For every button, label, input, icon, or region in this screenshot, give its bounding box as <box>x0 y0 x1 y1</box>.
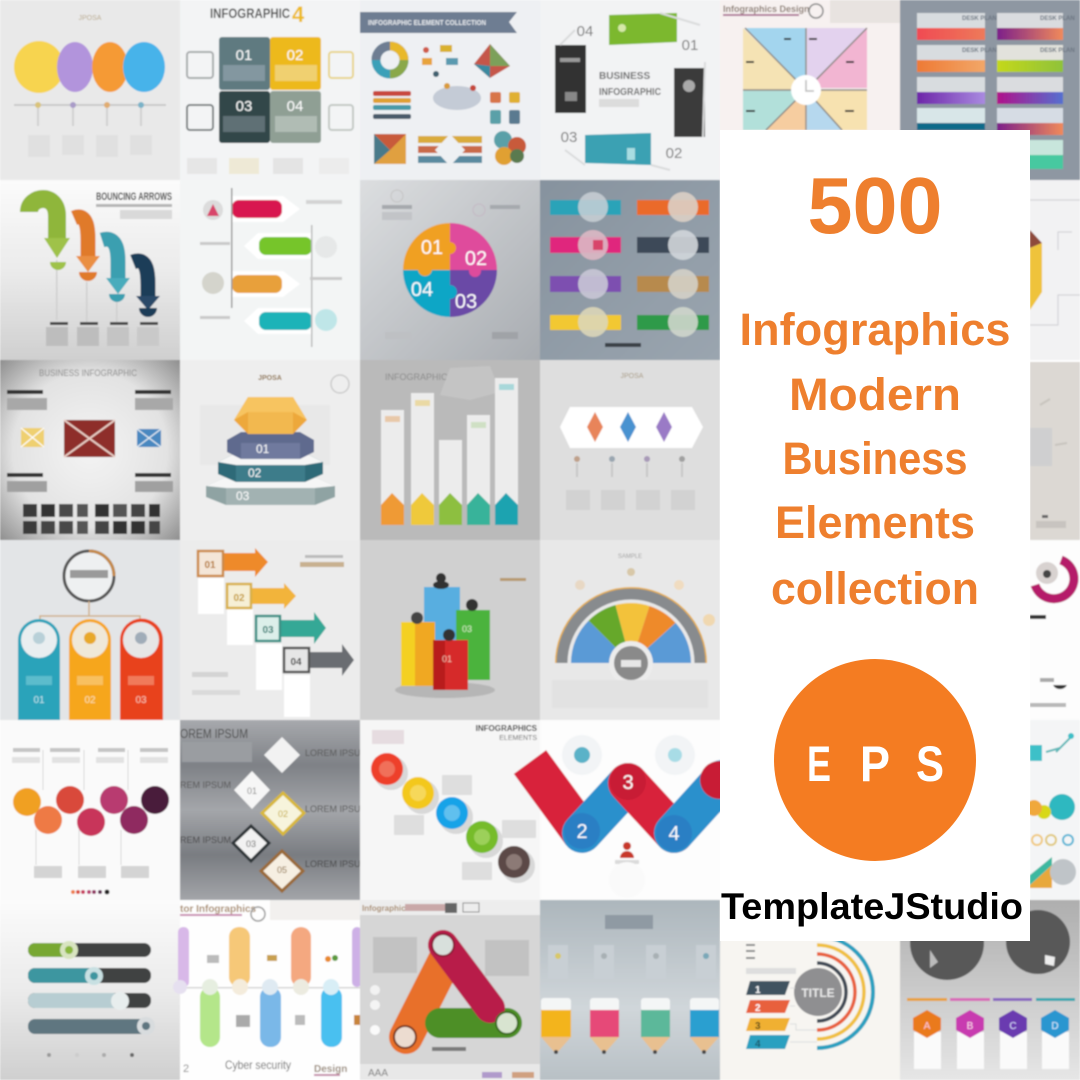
thumbnail: diamonds on grey stripes: LOREM IPSUM <box>305 748 368 758</box>
thumbnail: bouncing arrows <box>0 180 180 360</box>
thumbnail: bar chart with arrows: INFOGRAPHIC <box>385 372 448 382</box>
thumbnail: glass circle labels <box>540 180 720 360</box>
thumbnail: three pills with ring <box>0 540 180 722</box>
thumbnail: cyber security pills <box>173 900 362 1080</box>
thumbnail: ribbons with numbers: BUSINESS <box>599 71 650 82</box>
thumbnail: gradient label rows <box>900 0 1080 180</box>
thumbnail: diamonds on grey stripes: REM IPSUM <box>180 835 231 845</box>
thumbnail: four square infographic: 02 <box>287 47 303 64</box>
thumbnail: staircase arrows: 01 <box>204 560 216 571</box>
thumbnail: ribbons with numbers: INFOGRAPHIC <box>599 87 661 98</box>
thumbnail: diamonds on grey stripes: 03 <box>246 839 256 849</box>
thumbnail: stacked hexagon layers: 03 <box>236 489 250 503</box>
thumbnail: globes with labelled hexagons <box>900 900 1080 1080</box>
thumbnail: cyber security pills: Cyber security <box>225 1058 291 1072</box>
thumbnail: gradient label rows: DESK PLAN <box>1040 48 1075 54</box>
thumbnail: gradient label rows: DESK PLAN <box>962 16 997 22</box>
thumbnail: zigzag numbered ribbons: 4 <box>668 823 680 845</box>
thumbnail: puzzle circle: 01 <box>421 237 443 259</box>
thumbnail: diamonds on grey stripes: OREM IPSUM <box>180 726 248 741</box>
thumbnail: staircase arrows: 02 <box>233 593 245 604</box>
thumbnail: cyber security pills: 2 <box>183 1063 189 1075</box>
thumbnail: gradient label rows: DESK PLAN <box>962 48 997 54</box>
thumbnail: diamonds on grey stripes: 05 <box>277 865 287 875</box>
thumbnail fragment: beige map <box>1030 362 1080 540</box>
thumbnail: three pills with ring: 03 <box>135 695 147 706</box>
thumbnail: diamonds on grey stripes: 01 <box>247 786 257 796</box>
thumbnail: ribbons with numbers <box>540 0 720 180</box>
thumbnail: title with arcs: 3 <box>755 1021 761 1032</box>
thumbnail: pencils <box>540 900 720 1080</box>
thumbnail: title with arcs: TITLE <box>801 986 835 1000</box>
thumbnail: puzzle circle: 02 <box>465 248 487 270</box>
thumbnail: diamonds on grey stripes <box>180 720 368 900</box>
badge: EPS circle: E <box>807 736 831 792</box>
thumbnail: globes with labelled hexagons: A <box>924 1021 931 1032</box>
thumbnail: cyber security pills: tor Infographics <box>180 904 257 915</box>
thumbnail: puzzle circle: 04 <box>411 279 433 301</box>
white title panel <box>720 130 1030 941</box>
thumbnail: zigzag numbered ribbons: 2 <box>576 821 588 843</box>
thumbnail: hexagon frame pills <box>180 180 360 360</box>
thumbnail: diagonal circles: INFOGRAPHICS <box>476 724 538 733</box>
thumbnail: title with arcs: 1 <box>755 985 761 996</box>
thumbnail: zigzag numbered ribbons <box>530 720 738 900</box>
thumbnail: clock segments <box>720 0 900 180</box>
thumbnail: diamonds on grey stripes: 02 <box>278 809 288 819</box>
thumbnail: triangle of bands: AAA <box>368 1068 388 1079</box>
thumbnail: hexagons with diamonds <box>540 360 720 540</box>
thumbnail: title with arcs <box>720 900 900 1080</box>
thumbnail: 3D bars: 01 <box>442 654 452 664</box>
thumbnail: overlapping circles timeline: JPOSA <box>79 15 102 22</box>
thumbnail: ribbons with numbers: 04 <box>577 23 593 40</box>
heading: Infographics Modern Business Elements collection <box>740 304 1010 614</box>
badge: EPS circle: P <box>860 736 890 792</box>
thumbnail: 3D bars: 03 <box>462 624 472 634</box>
thumbnail: hexagons with diamonds: JPOSA <box>621 373 644 380</box>
thumbnail: semicircle gauge: SAMPLE <box>618 554 642 560</box>
thumbnail: puzzle circle: 03 <box>455 291 477 313</box>
thumbnail: staircase arrows: 03 <box>262 625 274 636</box>
thumbnail: ribbons with numbers: 03 <box>561 129 577 146</box>
thumbnail: diagonal circles <box>360 720 540 900</box>
thumbnail: globes with labelled hexagons: D <box>1051 1021 1059 1032</box>
thumbnail: bouncing arrows: BOUNCING ARROWS <box>96 191 172 203</box>
thumbnail: triangle of bands <box>360 900 540 1080</box>
thumbnail: diamonds on grey stripes: LOREM IPSUM <box>305 859 368 869</box>
heading: Infographics Modern Business Elements collection: Infographics <box>740 304 1010 355</box>
thumbnail: four square infographic: 4 <box>292 2 305 27</box>
thumbnail: overlapping circles timeline <box>0 0 180 180</box>
thumbnail: title with arcs: 2 <box>755 1003 761 1014</box>
thumbnail: 3D bars <box>360 540 540 720</box>
thumbnail: title with arcs: 4 <box>755 1039 761 1050</box>
thumbnail: diamonds on grey stripes: LOREM IPSUM <box>305 804 368 814</box>
thumbnail: puzzle circle <box>360 180 540 360</box>
thumbnail: staircase arrows <box>180 540 360 720</box>
thumbnail: diamonds on grey stripes: REM IPSUM <box>180 780 231 790</box>
thumbnail: stacked hexagon layers <box>180 360 360 540</box>
thumbnail: infographic element collection <box>360 0 540 180</box>
thumbnail: cyber security pills: Design <box>314 1064 347 1075</box>
thumbnail: four square infographic: INFOGRAPHIC <box>210 5 290 21</box>
thumbnail: bar chart with arrows <box>360 360 540 540</box>
thumbnail: four square infographic <box>180 0 360 180</box>
thumbnail: infographic element collection: INFOGRAPHIC ELEMENT COLLECTION <box>368 20 486 27</box>
thumbnail: ribbons with numbers: 01 <box>682 37 698 54</box>
thumbnail fragment: magenta ring <box>1030 540 1080 720</box>
thumbnail: three pills with ring: 02 <box>84 695 96 706</box>
number: 500: 500 <box>808 161 942 250</box>
thumbnail: stacked hexagon layers: 02 <box>248 466 262 480</box>
thumbnail: stacked hexagon layers: 01 <box>256 442 270 456</box>
thumbnail: ribbons with numbers: 02 <box>666 145 682 162</box>
badge: EPS circle <box>774 659 976 861</box>
thumbnail: envelopes and icons: BUSINESS INFOGRAPHIC <box>39 368 137 378</box>
thumbnail: globes with labelled hexagons: B <box>967 1021 974 1032</box>
thumbnail: globes with labelled hexagons: C <box>1009 1021 1017 1032</box>
thumbnail: semicircle gauge <box>540 540 720 720</box>
thumbnail: gradient label rows: DESK PLAN <box>1040 16 1075 22</box>
thumbnail: zigzag numbered ribbons: 3 <box>622 772 634 794</box>
heading: Infographics Modern Business Elements collection: collection <box>771 563 979 614</box>
thumbnail: four square infographic: 04 <box>287 98 303 115</box>
badge: EPS circle: S <box>916 736 944 792</box>
thumbnail fragment: yellow arrow chart <box>1030 180 1080 360</box>
thumbnail: three pills with ring: 01 <box>33 695 45 706</box>
thumbnail: four square infographic: 03 <box>236 98 252 115</box>
thumbnail: envelopes and icons <box>0 360 180 540</box>
thumbnail: slider bars <box>0 900 180 1080</box>
brand name: TemplateJStudio: TemplateJStudio <box>721 886 1023 927</box>
heading: Infographics Modern Business Elements collection: Elements <box>775 497 975 548</box>
thumbnail: triangle of bands: Infographics <box>362 904 411 913</box>
thumbnail: four square infographic: 01 <box>236 47 252 64</box>
thumbnail: staircase arrows: 04 <box>290 657 302 668</box>
thumbnail: diagonal circles: ELEMENTS <box>499 735 537 742</box>
heading: Infographics Modern Business Elements collection: Modern <box>789 369 961 420</box>
thumbnail: wave of circles timeline <box>0 720 180 900</box>
heading: Infographics Modern Business Elements collection: Business <box>782 433 968 484</box>
thumbnail: clock segments: Infographics Design <box>723 4 810 14</box>
thumbnail fragment: teal circles and charts <box>1026 720 1080 900</box>
thumbnail: stacked hexagon layers: JPOSA <box>258 375 282 382</box>
